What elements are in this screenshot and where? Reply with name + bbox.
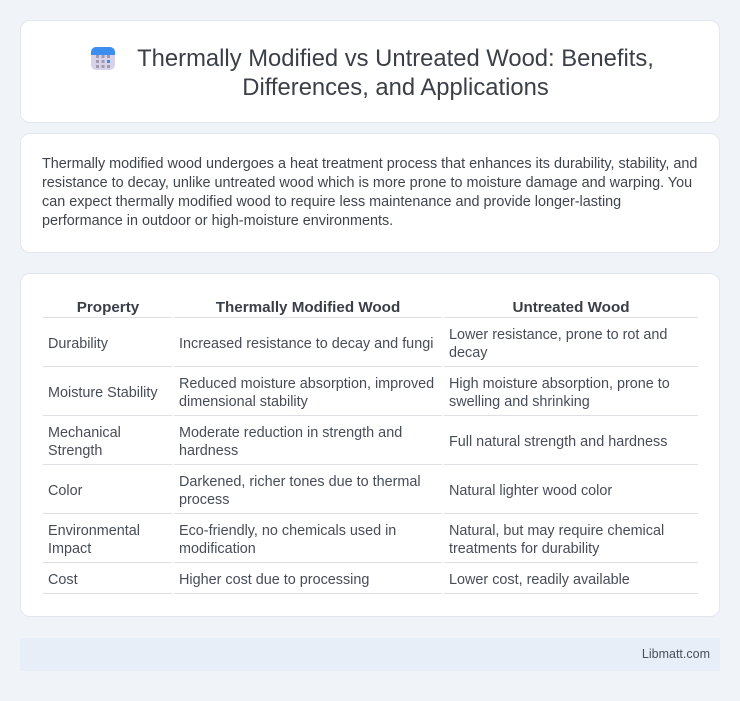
intro text panel bbox=[20, 133, 720, 253]
comparison table panel bbox=[20, 273, 720, 617]
footer credit: Libmatt.com bbox=[642, 647, 710, 661]
title: Differences, and Applications bbox=[242, 74, 549, 101]
row: durability: Durability bbox=[48, 336, 108, 352]
table header: untreated wood: Untreated Wood bbox=[512, 299, 630, 316]
row: durability: Increased resistance to decay and fungi bbox=[179, 336, 433, 352]
row: moisture stability: High moisture absorption, prone to bbox=[449, 376, 670, 392]
intro paragraph bbox=[42, 156, 697, 229]
row: environmental impact: treatments for durability bbox=[449, 541, 599, 557]
title bbox=[137, 45, 654, 101]
row: cost: Lower cost, readily available bbox=[449, 572, 630, 588]
row: moisture stability: dimensional stability bbox=[179, 394, 308, 410]
row: cost: Cost bbox=[48, 572, 78, 588]
row: moisture stability: swelling and shrinking bbox=[449, 394, 590, 410]
row: mechanical strength: Strength bbox=[48, 443, 102, 459]
intro paragraph: resistance to decay, unlike untreated wood which is more prone to moisture damage and warping. You bbox=[42, 175, 692, 191]
table header: property: Property bbox=[77, 299, 139, 316]
row: cost: Higher cost due to processing bbox=[179, 572, 369, 588]
row: mechanical strength: hardness bbox=[179, 443, 238, 459]
row: mechanical strength bbox=[48, 425, 667, 459]
footer bar bbox=[20, 638, 720, 671]
header card bbox=[20, 20, 720, 123]
row: color: Natural lighter wood color bbox=[449, 483, 612, 499]
row: environmental impact: Environmental bbox=[48, 523, 140, 539]
row: durability bbox=[48, 327, 667, 361]
row: cost bbox=[48, 572, 630, 588]
title: Thermally Modified vs Untreated Wood: Benefits, bbox=[137, 45, 654, 72]
intro paragraph: Thermally modified wood undergoes a heat treatment process that enhances its durability, stability, and bbox=[42, 156, 697, 172]
row: environmental impact: modification bbox=[179, 541, 256, 557]
row: color bbox=[48, 474, 612, 508]
row: durability: Lower resistance, prone to rot and bbox=[449, 327, 667, 343]
row: moisture stability bbox=[48, 376, 670, 410]
row: color: process bbox=[179, 492, 229, 508]
intro paragraph: performance in outdoor or high-moisture environments. bbox=[42, 213, 393, 229]
icon: calendar bbox=[91, 47, 115, 70]
row: color: Color bbox=[48, 483, 82, 499]
row: color: Darkened, richer tones due to thermal bbox=[179, 474, 421, 490]
table header: thermally modified wood: Thermally Modified Wood bbox=[216, 299, 400, 316]
row: environmental impact: Eco-friendly, no chemicals used in bbox=[179, 523, 396, 539]
row: moisture stability: Reduced moisture absorption, improved bbox=[179, 376, 434, 392]
row: mechanical strength: Full natural strength and hardness bbox=[449, 434, 667, 450]
row: environmental impact bbox=[48, 523, 664, 557]
row: moisture stability: Moisture Stability bbox=[48, 385, 158, 401]
row: durability: decay bbox=[449, 345, 487, 361]
intro paragraph: can expect thermally modified wood to require less maintenance and provide longer-lasting bbox=[42, 194, 621, 210]
row: environmental impact: Impact bbox=[48, 541, 91, 557]
row: environmental impact: Natural, but may require chemical bbox=[449, 523, 664, 539]
row: mechanical strength: Mechanical bbox=[48, 425, 121, 441]
row: mechanical strength: Moderate reduction in strength and bbox=[179, 425, 402, 441]
